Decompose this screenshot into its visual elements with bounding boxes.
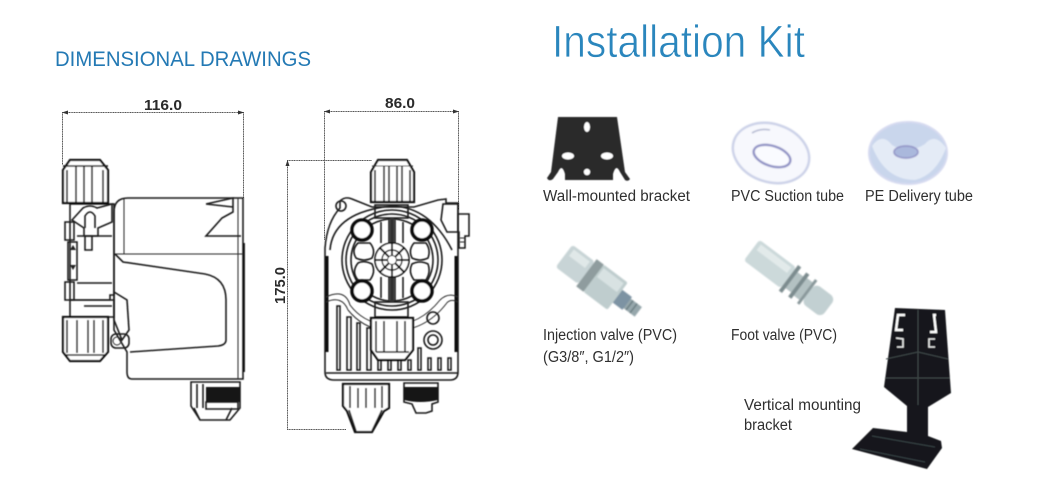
lower right connector	[404, 383, 438, 413]
indicator circle	[427, 312, 439, 324]
dimension: width 86.0: 86.0	[385, 95, 415, 112]
drawing: pump front view	[325, 160, 469, 432]
kit item: PVC suction tube: PVC Suction tube	[731, 188, 844, 205]
kit item: PVC suction tube	[725, 113, 844, 205]
pump body front	[325, 198, 458, 380]
kit item: injection valve	[543, 242, 677, 366]
kit item: foot valve	[731, 237, 838, 344]
heading: dimensional drawings: DIMENSIONAL DRAWINGS	[55, 48, 311, 71]
kit item: injection valve: (G3/8″, G1/2″)	[543, 349, 634, 366]
dimension: height 175.0	[272, 160, 372, 430]
kit item: wall-mounted bracket	[543, 117, 691, 205]
dimension: height 175.0: 175.0	[272, 267, 289, 304]
lower union nut front	[371, 318, 413, 360]
pump body side	[114, 198, 244, 379]
dimension: width 116.0: 116.0	[144, 97, 182, 114]
kit item: PE delivery tube: PE Delivery tube	[865, 188, 973, 205]
dimension: width 116.0	[62, 97, 244, 198]
bracket image	[547, 117, 630, 181]
kit item: injection valve: Injection valve (PVC)	[543, 327, 677, 344]
kit item: wall-mounted bracket: Wall-mounted bracket	[543, 188, 691, 205]
kit item: PE delivery tube	[865, 122, 973, 205]
tube coil image	[725, 113, 817, 193]
vent slots	[337, 306, 451, 370]
bottom connector side	[191, 382, 240, 420]
drawing: pump side view	[63, 160, 244, 420]
curved grooves	[326, 294, 458, 331]
valve image	[742, 237, 838, 321]
bottom union nut side	[63, 317, 108, 361]
screw rings	[352, 220, 432, 301]
head block side	[65, 204, 129, 348]
knob	[424, 331, 442, 349]
lower left connector	[343, 384, 389, 432]
top union nut front	[371, 160, 414, 202]
dimension: width 86.0	[324, 95, 459, 240]
side fitting	[441, 204, 469, 248]
kit item: vertical mounting bracket	[744, 308, 951, 469]
bracket image	[852, 308, 951, 469]
valve image	[554, 242, 649, 325]
tube coil image	[869, 122, 947, 184]
top union nut side	[63, 160, 108, 203]
pump head rings	[342, 205, 442, 317]
centre star	[375, 243, 409, 277]
kit item: vertical mounting bracket: bracket	[744, 417, 793, 434]
kit item: foot valve: Foot valve (PVC)	[731, 327, 837, 344]
heading: installation kit: Installation Kit	[552, 16, 805, 67]
kit item: vertical mounting bracket: Vertical mounting	[744, 397, 861, 414]
